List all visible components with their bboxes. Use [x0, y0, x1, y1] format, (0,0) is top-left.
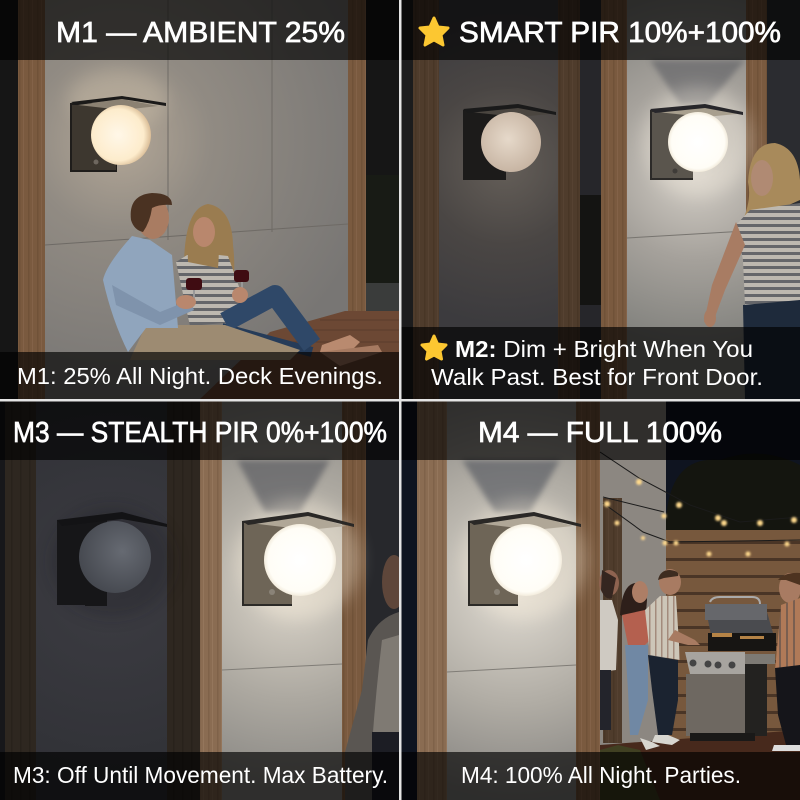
panel: smart PIR M2 — [401, 0, 800, 399]
scene: M1 patio wall — [0, 0, 399, 399]
illustration: seated couple — [103, 193, 382, 366]
heading: M1 ambient: M1 — AMBIENT 25% — [56, 17, 345, 49]
icon: M1 wall lamp — [68, 70, 168, 172]
illustration: party guests — [599, 569, 800, 752]
caption: M3: M3: Off Until Movement. Max Battery. — [13, 762, 388, 788]
icon: M2 dim lamp — [463, 104, 556, 180]
heading: smart PIR: SMART PIR 10%+100% — [459, 17, 781, 49]
icon: M3 off lamp — [57, 512, 167, 612]
panel: M3 stealth PIR — [0, 401, 406, 800]
icon: star — [420, 18, 448, 45]
caption band: M2 — [401, 327, 800, 399]
caption band: M4 — [401, 752, 800, 800]
illustration: woman walking — [704, 143, 800, 399]
header band: M1 — [0, 0, 399, 60]
header band: M2 — [401, 0, 800, 60]
caption band: M1 — [0, 352, 399, 399]
icon: M3 on lamp — [236, 500, 360, 620]
scene: M3 split wall — [0, 401, 399, 800]
illustration: string lights — [600, 452, 800, 556]
caption: M2 line 1: M2: Dim + Bright When You — [455, 336, 753, 362]
header band: M3 — [0, 401, 399, 460]
illustration: barbecue grill — [685, 597, 776, 741]
scene: M4 wall and backyard — [401, 401, 800, 800]
caption: M1: M1: 25% All Night. Deck Evenings. — [17, 363, 383, 389]
icon: star — [422, 336, 446, 359]
icon: M4 lamp — [462, 500, 586, 620]
scene: M2 split wall — [401, 0, 800, 399]
caption: M2 line 2: Walk Past. Best for Front Door. — [431, 364, 763, 390]
header band: M4 — [401, 401, 800, 460]
panel: M1 ambient 25% — [0, 0, 399, 399]
heading: M3 stealth: M3 — STEALTH PIR 0%+100% — [13, 417, 387, 449]
illustration: person at edge — [345, 555, 399, 800]
caption: M4: M4: 100% All Night. Parties. — [461, 762, 741, 788]
heading: M4 full: M4 — FULL 100% — [478, 417, 722, 449]
caption band: M3 — [0, 752, 399, 800]
icon: M2 bright lamp — [643, 87, 753, 197]
panel: M4 full 100% — [401, 401, 800, 800]
